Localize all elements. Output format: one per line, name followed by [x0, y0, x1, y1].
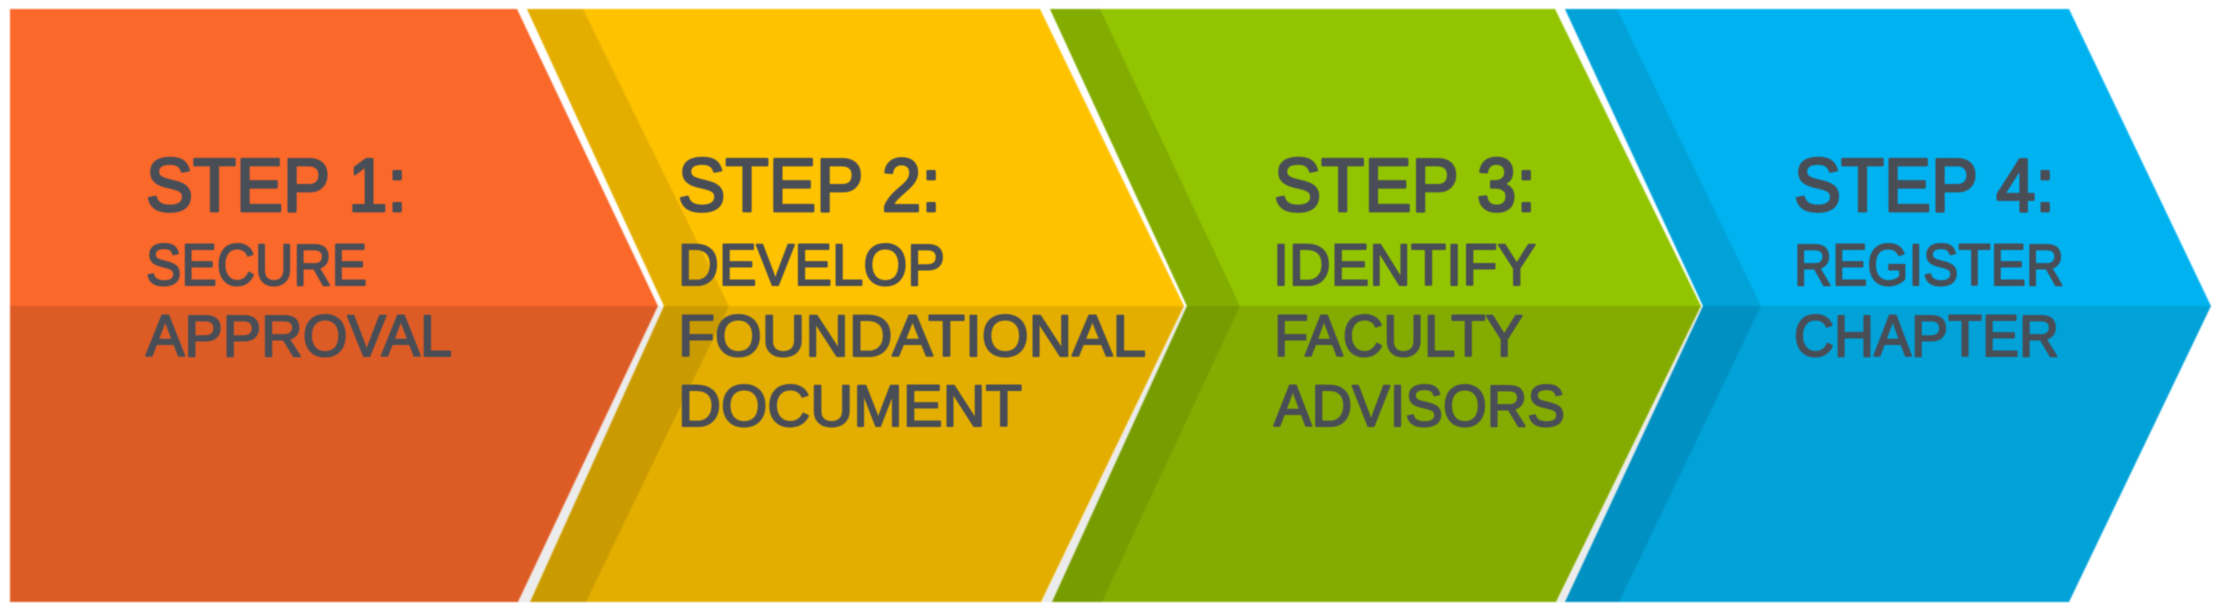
step 2 heading: STEP 2:: [678, 143, 941, 227]
step 3 heading: STEP 3:: [1274, 143, 1536, 227]
step 4 description: REGISTER: [1794, 233, 2064, 298]
step 2 description: DEVELOP: [678, 233, 945, 298]
step 3 description: [1273, 233, 1565, 439]
step 1 description: SECURE: [146, 233, 367, 298]
step 3 description: FACULTY: [1274, 304, 1523, 369]
step 3 description: IDENTIFY: [1273, 233, 1536, 298]
step 2 description: DOCUMENT: [678, 374, 1022, 439]
step 3 description: ADVISORS: [1274, 374, 1565, 439]
step 2 description: FOUNDATIONAL: [678, 304, 1146, 369]
panel: step 3 identify faculty advisors: [1050, 9, 1701, 602]
step 1 description: APPROVAL: [146, 304, 452, 369]
panel: step 1 secure approval: [10, 9, 658, 602]
panel: step 2 develop foundational document: [527, 9, 1184, 602]
step 4 description: CHAPTER: [1794, 304, 2059, 369]
step 1 heading: STEP 1:: [146, 143, 407, 227]
step 4 heading: STEP 4:: [1794, 143, 2055, 227]
step 4 description: [1794, 233, 2064, 369]
step 2 description: [678, 233, 1146, 439]
panel: step 4 register chapter: [1565, 9, 2211, 602]
step 1 description: [146, 233, 452, 369]
